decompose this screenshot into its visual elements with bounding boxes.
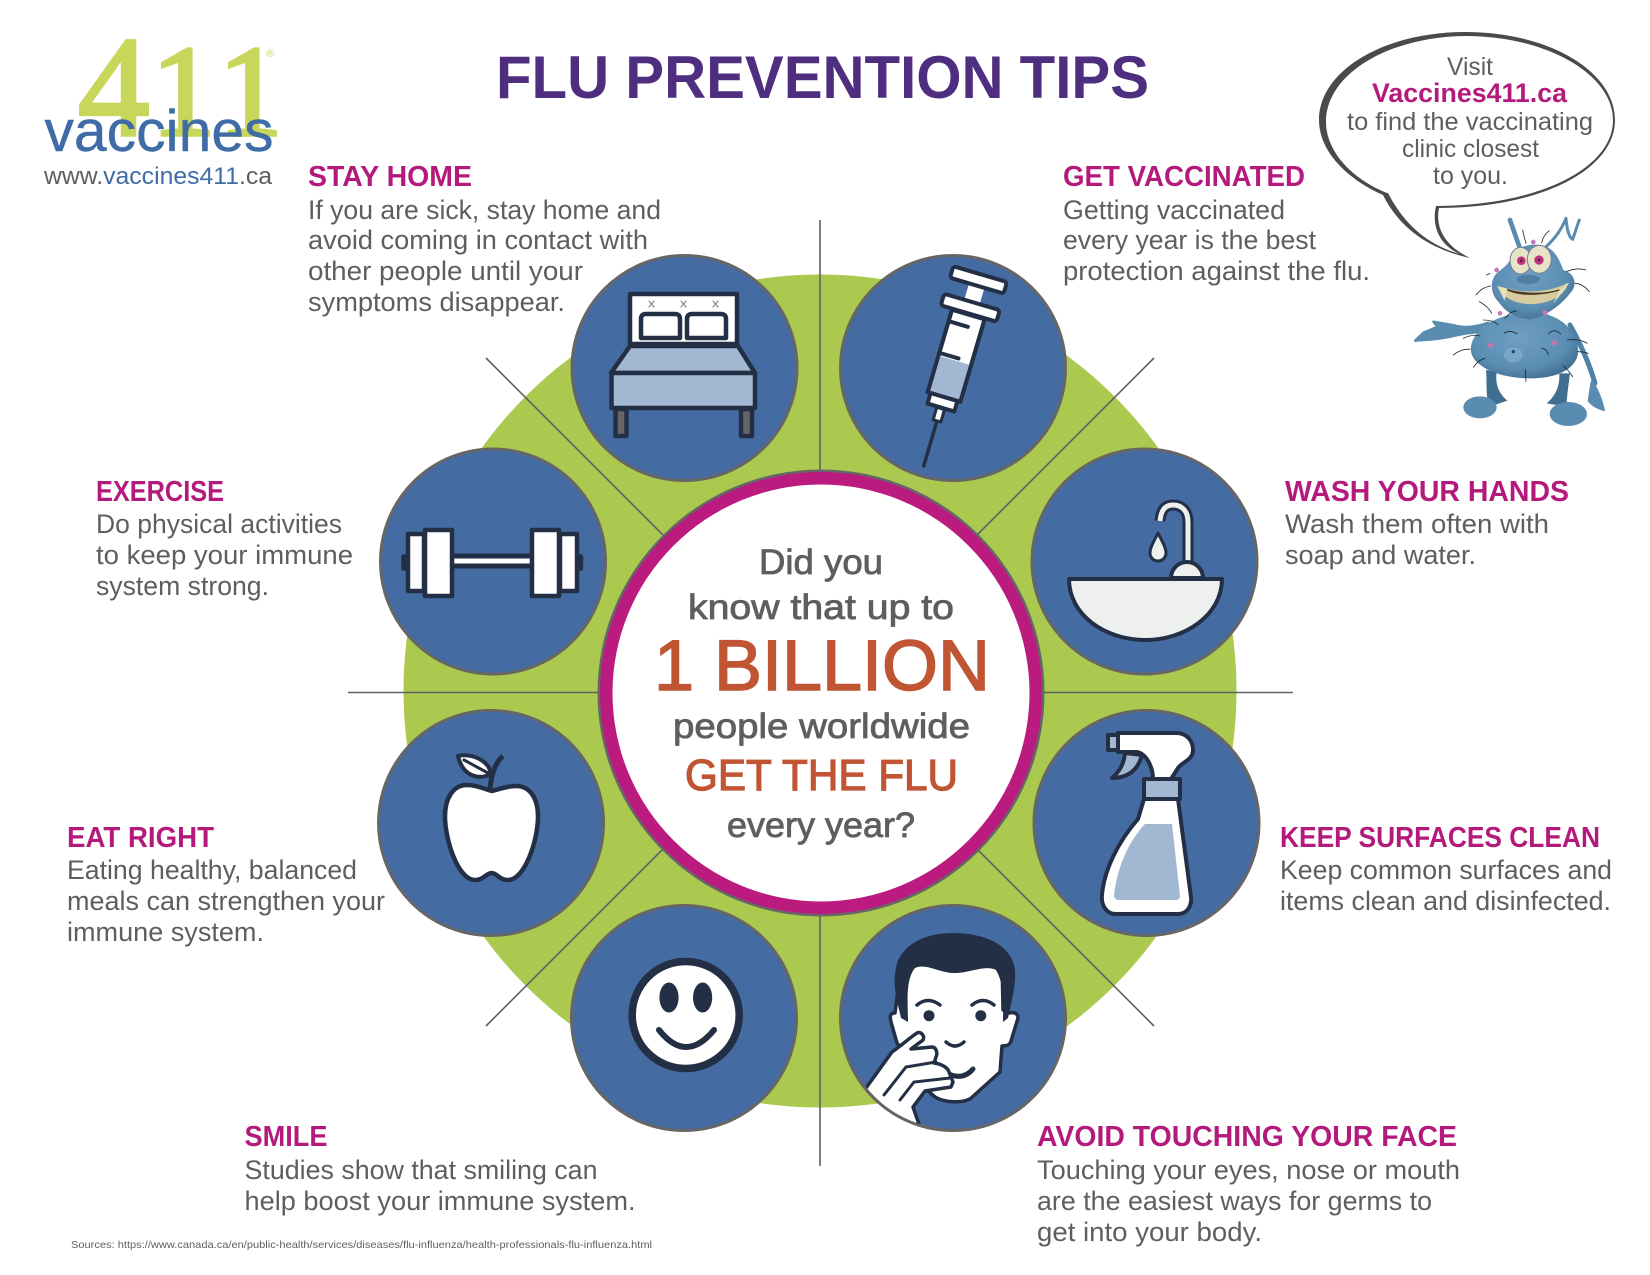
text block: smile: help boost your immune system. <box>244 1186 636 1216</box>
icon: syringe <box>896 266 1008 474</box>
bubble text: clinic closest <box>1402 135 1539 163</box>
tip circle: smile (smiley icon) <box>572 906 796 1130</box>
logo: vaccines411: 4 <box>78 8 150 166</box>
bubble text <box>1347 53 1593 190</box>
text block: avoid touching your face: Touching your eyes, nose or mouth <box>1037 1155 1460 1185</box>
title: FLU PREVENTION TIPS <box>496 44 1149 111</box>
text block: get vaccinated: protection against the flu. <box>1063 256 1370 286</box>
text block: eat right <box>67 822 385 947</box>
text block: keep surfaces clean: KEEP SURFACES CLEAN <box>1280 822 1600 854</box>
text block: exercise: to keep your immune <box>96 540 353 570</box>
logo: vaccines411 <box>43 8 283 190</box>
text block: get vaccinated <box>1063 161 1370 286</box>
icon: sink <box>1069 505 1222 640</box>
text block: eat right: meals can strengthen your <box>67 886 385 916</box>
icon: smiley <box>632 962 739 1068</box>
text block: stay home: symptoms disappear. <box>308 287 565 317</box>
text block: avoid touching your face <box>1037 1121 1460 1247</box>
tip circle: eat right (apple icon) <box>378 710 604 936</box>
text block: keep surfaces clean <box>1280 822 1612 916</box>
icon: bed <box>611 294 755 436</box>
logo: vaccines411: vaccines <box>44 99 274 164</box>
statistic text: every year? <box>727 806 915 845</box>
text block: stay home: If you are sick, stay home and <box>308 195 661 225</box>
text block: exercise: Do physical activities <box>96 509 342 539</box>
icon: face with hand <box>860 933 1018 1130</box>
spokes dividing the wheel <box>348 220 1293 1166</box>
text block: smile: Studies show that smiling can <box>244 1155 598 1185</box>
text block: keep surfaces clean: Keep common surfaces and <box>1280 855 1612 885</box>
text block: avoid touching your face: get into your body. <box>1037 1217 1262 1247</box>
bubble text: to find the vaccinating <box>1347 108 1593 136</box>
text block: stay home: avoid coming in contact with <box>308 225 648 255</box>
bubble text: to you. <box>1433 162 1508 190</box>
text block: eat right: EAT RIGHT <box>67 822 215 854</box>
text block: exercise: EXERCISE <box>96 476 224 508</box>
green background disc <box>404 274 1236 1108</box>
bubble text: Vaccines411.ca <box>1372 78 1568 108</box>
text block: avoid touching your face: AVOID TOUCHING YOUR FACE <box>1037 1121 1457 1153</box>
text block: wash your hands: Wash them often with <box>1285 509 1549 539</box>
logo: vaccines411: 1 <box>218 20 283 164</box>
text block: smile <box>244 1121 636 1216</box>
statistic text: GET THE FLU <box>685 751 958 800</box>
tip circle: get vaccinated (syringe icon) <box>840 256 1066 480</box>
text block: keep surfaces clean: items clean and disinfected. <box>1280 886 1611 916</box>
speech bubble callout <box>1319 32 1615 258</box>
tip circle: wash your hands (sink icon) <box>1032 449 1257 674</box>
logo: vaccines411: ® <box>266 48 274 60</box>
text block: exercise <box>96 476 353 601</box>
text block: stay home: other people until your <box>308 256 583 286</box>
statistic text <box>654 543 990 845</box>
icon: apple <box>445 755 538 880</box>
text block: get vaccinated: every year is the best <box>1063 225 1316 255</box>
text block: eat right: Eating healthy, balanced <box>67 855 357 885</box>
tip circle: stay home (bed icon) <box>572 256 797 480</box>
text block: smile: SMILE <box>244 1121 328 1153</box>
icon: spray bottle <box>1102 733 1193 914</box>
sources note: Sources: https://www.canada.ca/en/public-health/services/diseases/flu-influenza/health-professionals-flu-influenza.html <box>71 1239 652 1251</box>
text block: wash your hands: WASH YOUR HANDS <box>1285 476 1569 508</box>
text block: exercise: system strong. <box>96 571 269 601</box>
text block: avoid touching your face: are the easiest ways for germs to <box>1037 1186 1432 1216</box>
logo: vaccines411: www.vaccines411.ca <box>43 163 273 190</box>
text block: wash your hands <box>1285 476 1569 570</box>
text block: stay home: STAY HOME <box>308 161 472 193</box>
logo: vaccines411: 1 <box>151 20 216 164</box>
icon: dumbbell <box>404 530 581 596</box>
icon: blue germ mascot <box>1415 218 1604 426</box>
statistic text: know that up to <box>688 588 954 627</box>
tip circle: exercise (dumbbell icon) <box>380 449 606 674</box>
tip circle: avoid touching your face (face icon) <box>840 906 1066 1130</box>
text block: eat right: immune system. <box>67 917 264 947</box>
text block: stay home <box>308 161 661 317</box>
statistic text: people worldwide <box>673 707 970 746</box>
text block: wash your hands: soap and water. <box>1285 540 1476 570</box>
tip circle: keep surfaces clean (spray bottle icon) <box>1034 710 1259 936</box>
text block: get vaccinated: GET VACCINATED <box>1063 161 1305 193</box>
central ring with flu statistic <box>598 470 1044 916</box>
statistic text: Did you <box>759 543 883 582</box>
bubble text: Visit <box>1447 53 1493 81</box>
statistic text: 1 BILLION <box>654 627 990 706</box>
text block: get vaccinated: Getting vaccinated <box>1063 195 1285 225</box>
